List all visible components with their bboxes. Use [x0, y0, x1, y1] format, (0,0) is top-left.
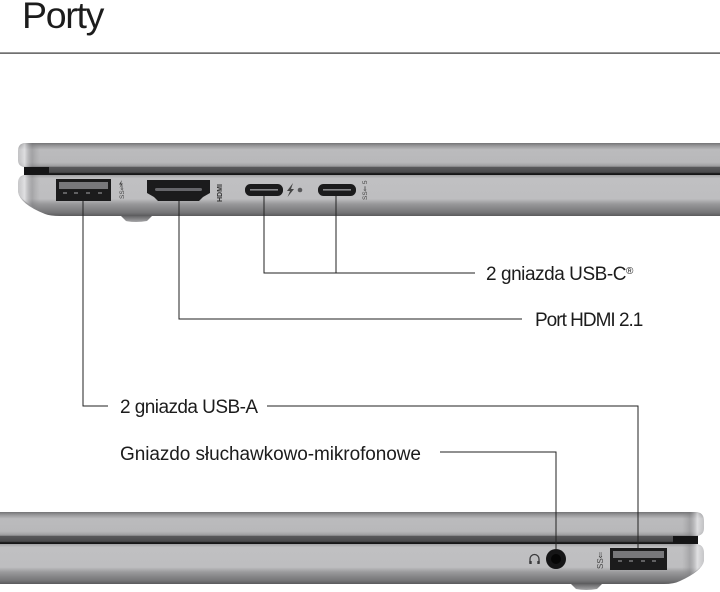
port: USB-C Thunderbolt — [245, 184, 283, 196]
port: audio jack — [546, 549, 566, 569]
label: audio jack: Gniazdo słuchawkowo-mikrofonowe — [120, 444, 421, 465]
laptop: right side view — [0, 512, 704, 590]
label: USB symbol: SS⇐ — [119, 184, 126, 199]
rubber foot — [120, 215, 153, 222]
leader line: USB-A left — [83, 201, 108, 406]
lid end highlight — [18, 143, 40, 167]
port: HDMI — [147, 180, 210, 201]
hinge shadow — [673, 536, 698, 543]
port: USB-C — [318, 184, 356, 196]
base end highlight — [682, 544, 704, 580]
label: USB-C symbol: SS⇐ 5 — [362, 180, 369, 200]
indicator LED — [298, 188, 302, 192]
port: USB-A — [610, 548, 667, 570]
hinge gap — [24, 166, 720, 175]
base — [0, 544, 704, 584]
hinge shadow — [24, 167, 49, 174]
label: HDMI port: Port HDMI 2.1 — [535, 310, 643, 331]
title rule — [0, 52, 720, 54]
icon: headphones — [530, 554, 539, 564]
label: USB symbol: SS⇐ — [596, 551, 605, 569]
leader line: USB-A right — [267, 406, 638, 548]
leader line: HDMI — [179, 201, 522, 319]
lid — [18, 143, 720, 167]
hinge gap — [0, 535, 698, 544]
icon: lightning — [287, 183, 294, 197]
leader lines: USB-C — [264, 196, 475, 273]
label: USB-C ports: ® — [626, 266, 634, 277]
label: USB-C ports: 2 gniazda USB-C — [486, 264, 626, 285]
base — [18, 175, 720, 216]
icon: small lightning — [119, 180, 123, 188]
lid — [0, 512, 704, 536]
label: HDMI: HDMI — [217, 184, 224, 202]
lid end highlight — [682, 512, 704, 536]
leader line: audio jack — [440, 452, 556, 550]
laptop: left side view — [18, 143, 720, 222]
label: USB-A ports: 2 gniazda USB-A — [120, 397, 258, 418]
base end highlight — [18, 175, 40, 211]
port: USB-A — [56, 179, 111, 201]
rubber foot — [570, 583, 603, 590]
